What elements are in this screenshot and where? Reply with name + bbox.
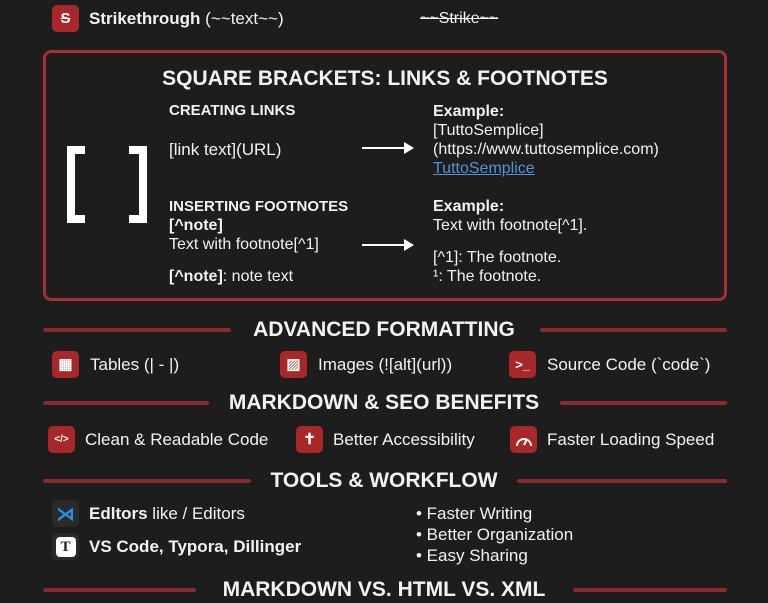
heading: advanced formatting: ADVANCED FORMATTING: [253, 318, 515, 341]
icon: vscode: ⋊: [56, 504, 74, 524]
icon: code: </>: [54, 434, 69, 444]
tools list: [52, 500, 301, 560]
icon: terminal: >_: [515, 356, 530, 372]
links example: (https://www.tuttosemplice.com): [433, 141, 659, 158]
inserting footnotes: [169, 198, 348, 285]
icon: table: [52, 351, 79, 378]
benefits bullets: • Better Organization: [416, 525, 573, 544]
icon: accessibility: ✝: [303, 430, 316, 448]
links example: [TuttoSemplice]: [433, 122, 544, 139]
arrow: footnotes: [362, 244, 412, 246]
heading: markdown vs html vs xml: MARKDOWN VS. HTML VS. XML: [223, 578, 545, 601]
arrow: links: [362, 147, 412, 149]
benefits bullets: • Easy Sharing: [416, 546, 528, 565]
seo items: Faster Loading Speed: [547, 430, 714, 449]
creating links: CREATING LINKS: [169, 102, 295, 119]
icon: strikethrough: S: [60, 10, 70, 26]
footnotes example: [433, 198, 587, 285]
icon: brackets: [67, 146, 147, 223]
inserting footnotes: INSERTING FOOTNOTES: [169, 198, 348, 215]
icon: terminal: [509, 351, 536, 378]
icon: vscode: [52, 500, 79, 527]
icon: strikethrough: [52, 5, 79, 32]
tools list: VS Code, Typora, Dillinger: [89, 537, 301, 556]
panel: square brackets: [43, 50, 727, 301]
seo items: [48, 426, 714, 453]
seo items: Clean & Readable Code: [85, 430, 268, 449]
icon: typora: [52, 533, 79, 560]
advanced formatting items: Images (![alt](url)): [318, 355, 452, 374]
advanced formatting items: Source Code (`code`): [547, 355, 710, 374]
footnotes example: ¹: The footnote.: [433, 268, 541, 285]
creating links: [169, 102, 295, 159]
heading: tools: TOOLS & WORKFLOW: [270, 469, 498, 492]
tools list: Edltors like / Editors: [89, 504, 245, 523]
benefits bullets: [416, 504, 573, 565]
title: SQUARE BRACKETS: LINKS & FOOTNOTES: [162, 67, 608, 90]
links example: Example:: [433, 103, 504, 120]
seo items: Better Accessibility: [333, 430, 475, 449]
links example: [433, 103, 659, 177]
footnotes example: [^1]: The footnote.: [433, 249, 561, 266]
advanced formatting items: [52, 351, 710, 378]
heading: seo benefits: MARKDOWN & SEO BENEFITS: [229, 391, 539, 414]
inserting footnotes: [^note]: [169, 217, 223, 234]
icon: speedometer: [510, 426, 537, 453]
inserting footnotes: Text with footnote[^1]: [169, 236, 319, 253]
benefits bullets: • Faster Writing: [416, 504, 532, 523]
footnotes example: Text with footnote[^1].: [433, 217, 587, 234]
inserting footnotes: [^note]: note text: [169, 268, 293, 285]
strike example: ~~Strike~~: [420, 10, 498, 27]
strikethrough row: [52, 5, 498, 32]
icon: image: ▨: [286, 356, 301, 372]
icon: typora: T: [60, 538, 70, 554]
creating links: [link text](URL): [169, 140, 281, 159]
icon: code: [48, 426, 75, 453]
icon: image: [280, 351, 307, 378]
strikethrough label: Strikethrough (~~text~~): [89, 9, 284, 28]
links example: TuttoSemplice: [433, 160, 535, 177]
icon: table: ▦: [58, 356, 73, 372]
icon: accessibility: [296, 426, 323, 453]
advanced formatting items: Tables (| - |): [90, 355, 179, 374]
footnotes example: Example:: [433, 198, 504, 215]
